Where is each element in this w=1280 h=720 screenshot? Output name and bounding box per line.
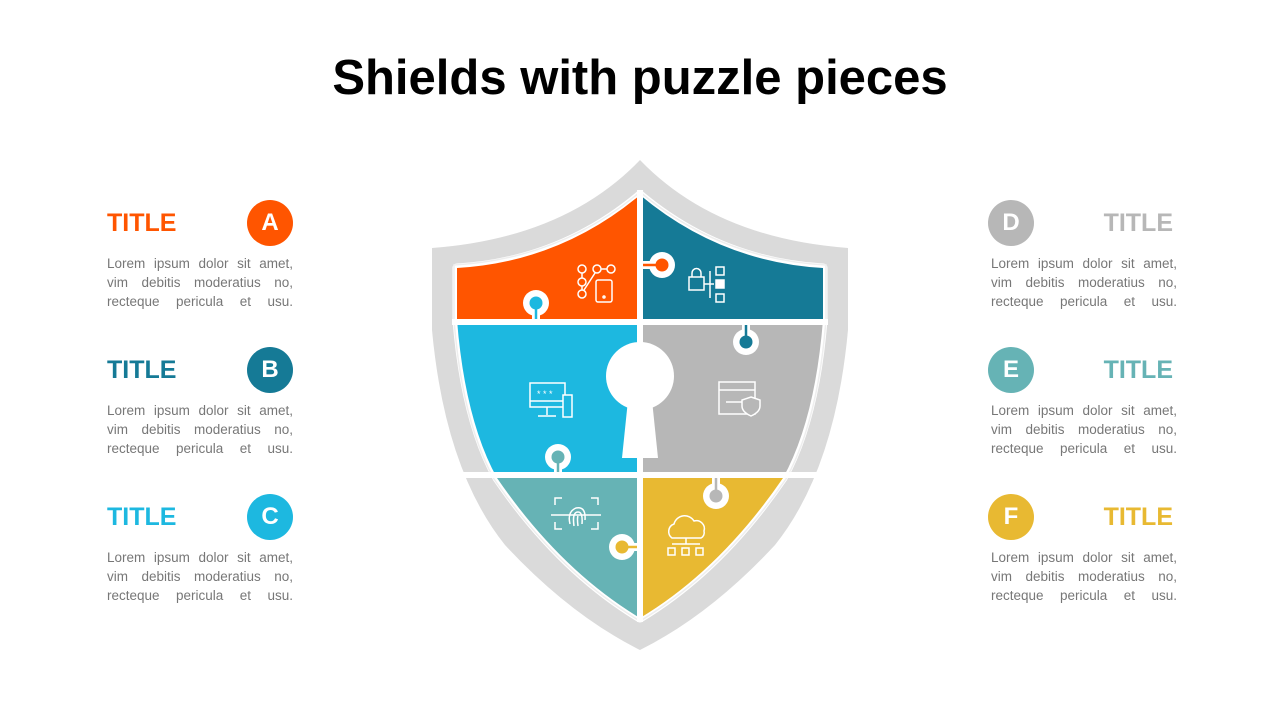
item E: vim debitis moderatius no, (991, 422, 1177, 437)
item C (107, 494, 293, 603)
icon: browser shield (719, 382, 760, 416)
item B: TITLE (107, 356, 176, 384)
item F: recteque pericula et usu. (991, 588, 1177, 603)
icon: lock hierarchy (689, 267, 724, 302)
icon: cloud network (668, 516, 704, 555)
title: Shields with puzzle pieces (332, 51, 948, 105)
item C: TITLE (107, 503, 176, 531)
item C: C (261, 503, 279, 530)
item F: vim debitis moderatius no, (991, 569, 1177, 584)
item F: TITLE (1104, 503, 1173, 531)
item C: vim debitis moderatius no, (107, 569, 293, 584)
item A (107, 200, 293, 309)
item B: Lorem ipsum dolor sit amet, (107, 403, 293, 418)
item B: B (261, 356, 279, 383)
item D: TITLE (1104, 209, 1173, 237)
icon: computer password (530, 383, 572, 417)
item E: TITLE (1104, 356, 1173, 384)
item D: vim debitis moderatius no, (991, 275, 1177, 290)
item F: Lorem ipsum dolor sit amet, (991, 550, 1177, 565)
item F: F (1004, 503, 1018, 530)
item F (988, 494, 1177, 603)
item E: Lorem ipsum dolor sit amet, (991, 403, 1177, 418)
item E (988, 347, 1177, 456)
keyhole (606, 342, 674, 458)
item E: recteque pericula et usu. (991, 441, 1177, 456)
icon: computer password: * * * (537, 389, 553, 399)
item A: recteque pericula et usu. (107, 294, 293, 309)
icon: network mobile (578, 265, 615, 302)
item A: A (261, 209, 279, 236)
item A: Lorem ipsum dolor sit amet, (107, 256, 293, 271)
item B: vim debitis moderatius no, (107, 422, 293, 437)
item D: Lorem ipsum dolor sit amet, (991, 256, 1177, 271)
connector knobs (523, 252, 759, 560)
item D: D (1002, 209, 1020, 236)
item C: Lorem ipsum dolor sit amet, (107, 550, 293, 565)
icon: fingerprint (551, 498, 601, 529)
item D (988, 200, 1177, 309)
item C: recteque pericula et usu. (107, 588, 293, 603)
shield (432, 160, 848, 650)
item E: E (1003, 356, 1019, 383)
item D: recteque pericula et usu. (991, 294, 1177, 309)
item B (107, 347, 293, 456)
item B: recteque pericula et usu. (107, 441, 293, 456)
item A: vim debitis moderatius no, (107, 275, 293, 290)
item A: TITLE (107, 209, 176, 237)
